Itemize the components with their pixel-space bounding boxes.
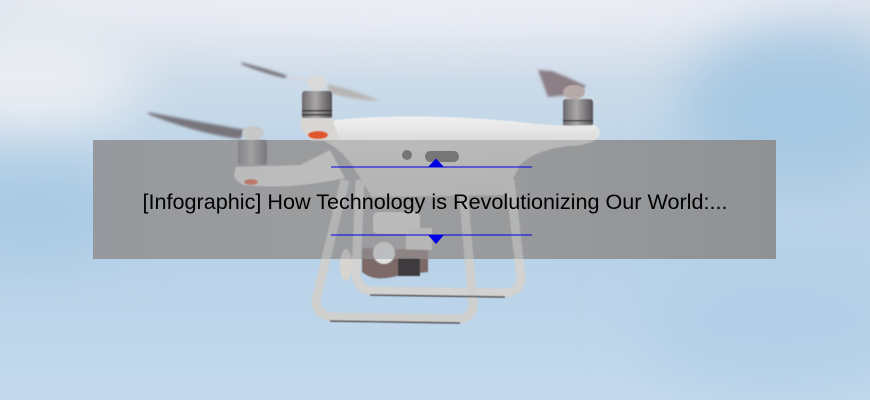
sensors under body bbox=[402, 150, 459, 162]
landing gear bbox=[316, 180, 521, 323]
front right rotor and motor bbox=[538, 70, 608, 127]
front left rotor and motor bbox=[240, 62, 380, 119]
drone seen through band bbox=[234, 140, 596, 259]
bottom divider with arrow bbox=[331, 234, 532, 244]
caption band bbox=[93, 140, 776, 259]
top divider with arrow bbox=[331, 158, 532, 168]
front left arm end with red light bbox=[300, 118, 340, 141]
title: [Infographic] How Technology is Revolutionizing Our World:... bbox=[143, 189, 727, 214]
gimbal camera bbox=[340, 212, 432, 281]
rear left rotor and motor bbox=[147, 112, 345, 186]
drone main body bbox=[322, 116, 600, 197]
drone photo bbox=[147, 62, 608, 323]
